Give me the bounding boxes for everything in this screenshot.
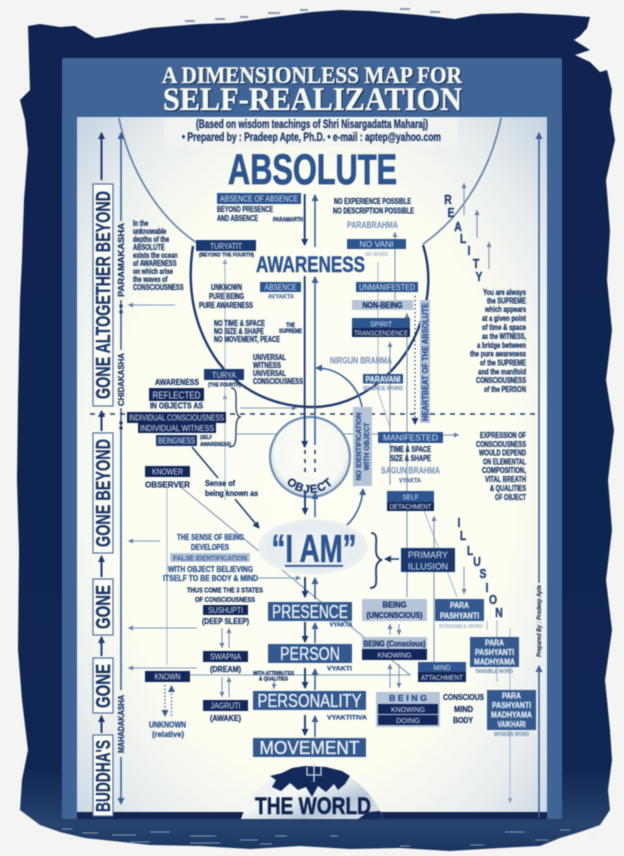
box: absence of absence: ABSENCE OF ABSENCE [220, 194, 298, 204]
text: beyond presence: PARAMARTH [273, 218, 303, 224]
box: manifested: MANIFESTED [383, 434, 438, 442]
subtitle text: (Based on wisdom teachings of Shri Nisargadatta Maharaj) [196, 119, 428, 131]
heading: awareness: AWARENESS [256, 252, 365, 277]
text: with object believing [163, 565, 258, 583]
box: para pashyanti madhyama vaikhari: MADHYAMA [491, 710, 532, 720]
text: no time and space: NO SIZE & SHAPE [214, 327, 264, 336]
box: spirit transcendence: TRANSCENDENCE [354, 328, 408, 338]
box: being conscious knowing: KNOWING [378, 650, 412, 660]
label: nirgun brahma: NIRGUN BRAHMA [330, 356, 392, 366]
box: para pashyanti madhyama: PASHYANTI [475, 648, 514, 657]
label: awake: (AWAKE) [210, 713, 241, 723]
text block: unknowable depths: In the [133, 220, 148, 228]
box: no identification: WITH OBJECT [362, 422, 371, 470]
box: para pashyanti: PARA [450, 601, 469, 610]
text: no time and space: NO TIME & SPACE [214, 319, 265, 328]
box: individual witness: INDIVIDUAL WITNESS [140, 424, 214, 433]
title [162, 63, 462, 118]
text block: unknowable depths [133, 220, 184, 292]
text block: expression of consciousness: ON ELEMENTAL [483, 458, 526, 466]
box: personality: PERSONALITY [258, 691, 362, 711]
illusion vertical letters: U [473, 555, 481, 569]
stage arrows [100, 133, 102, 733]
box: para pashyanti madhyama: PARA [485, 638, 504, 648]
subtitle text [182, 119, 441, 144]
I am ellipse: “I AM” [272, 528, 356, 571]
box: no vani [347, 239, 406, 249]
box: being conscious knowing [362, 637, 427, 660]
text: conscious mind body: CONSCIOUS [443, 692, 484, 702]
box: being unconscious: (UNCONSCIOUS) [366, 611, 423, 620]
text block: expression of consciousness: EXPRESSION OF [480, 431, 526, 440]
text: no experience: NO DESCRIPTION POSSIBLE [333, 206, 414, 216]
box: beingness: BEINGNESS [158, 436, 195, 446]
text block: unknowable depths: the waves of [133, 276, 168, 284]
text: the supreme: SUPREME [279, 329, 302, 335]
central down and up arrows [305, 577, 315, 737]
box: knower [145, 466, 190, 477]
illusion vertical letters: I [486, 581, 488, 595]
illusion vertical letters: L [460, 529, 466, 543]
reality vertical letters: T [473, 257, 480, 271]
label: intangible word: INTANGIBLE WORD [439, 624, 483, 630]
text block: you are always: CONSCIOUSNESS [476, 376, 526, 385]
box: para pashyanti madhyama: MADHYAMA [474, 658, 515, 666]
icon: continents [270, 766, 350, 797]
reality vertical letters: A [454, 220, 462, 234]
box: primary illusion: PRIMARY [408, 550, 449, 561]
stage: gone altogether beyond: GONE ALTOGETHER BEYOND [93, 191, 115, 399]
brace at individual consciousness [229, 388, 240, 447]
label: self awareness: (SELF [200, 435, 212, 441]
label: tangible word: TANGIBLE WORD [475, 669, 513, 675]
brace at I am [370, 533, 382, 588]
text: awareness reflected: AWARENESS [155, 377, 199, 387]
subtitle panel [164, 118, 458, 147]
the world globe [241, 762, 384, 820]
dotted arrow heartbeat [414, 296, 416, 424]
box: para pashyanti madhyama vaikhari: PASHYANTI [492, 701, 531, 710]
box: absence: ABSENCE [264, 283, 296, 292]
text block: unknowable depths: CONSCIOUSNESS [133, 284, 184, 292]
reality vertical letters [444, 193, 483, 284]
akasha scale line: PARAMAKASHA [116, 223, 126, 297]
object circle [268, 369, 352, 499]
text: conscious mind body [443, 692, 484, 725]
text: universal witness [253, 353, 303, 386]
text block: expression of consciousness: VITAL BREATH [485, 475, 526, 484]
dotted arrows known unknown [165, 685, 172, 716]
label: the fourth: (THE FOURTH) [208, 382, 241, 388]
label: deep sleep: (DEEP SLEEP) [202, 616, 249, 626]
text: no experience [333, 197, 414, 216]
reality vertical letters: R [444, 193, 452, 207]
text: unknown pure being: UNKNOWN [211, 283, 242, 292]
text block: expression of consciousness: & QUALITIES [490, 484, 526, 493]
text: with object believing: ITSELF TO BE BODY & MIND [163, 574, 258, 583]
text block: you are always: You are always [483, 288, 526, 297]
box: para pashyanti madhyama vaikhari: PARA [502, 692, 521, 700]
text block: expression of consciousness: WOULD DEPEND [479, 448, 526, 458]
text block: you are always: of the PERSON [484, 385, 526, 394]
box: self detachment [387, 491, 434, 511]
box: self detachment: SELF [402, 492, 419, 502]
text: beyond presence: BEYOND PRESENCE [217, 205, 273, 214]
box: primary illusion: ILLUSION [408, 562, 448, 572]
text block: you are always [470, 288, 526, 394]
box: being knowing doing: KNOWING [391, 705, 425, 714]
illusion vertical letters: L [467, 544, 473, 558]
text block: you are always: the SUPREME [487, 296, 526, 306]
box: sushupti: SUSHUPTI [208, 606, 243, 615]
text block: you are always: and the manifold [478, 368, 526, 376]
reality vertical letters: L [460, 232, 466, 246]
object circle: OBJECT [287, 477, 332, 494]
heading: the world: THE WORLD [255, 793, 371, 820]
box: being unconscious: BEING [382, 600, 406, 610]
text: conscious mind body: MIND [454, 704, 473, 714]
box: no identification: NO IDENTIFICATION [354, 412, 363, 480]
box: turya: TURYA [212, 370, 236, 380]
label: parabrahma: PARABRAHMA [347, 220, 398, 231]
title: A DIMENSIONLESS MAP FOR [162, 63, 462, 88]
left stage column [93, 133, 115, 816]
label: no word: NO WORD [365, 252, 388, 258]
box: known [145, 671, 190, 682]
box: para pashyanti [435, 599, 484, 621]
text block: you are always: of time & space [482, 323, 526, 332]
text: no time and space: NO MOVEMENT, PEACE [214, 335, 280, 344]
box: para pashyanti madhyama vaikhari [487, 690, 536, 730]
illusion vertical letters: S [480, 567, 487, 581]
label: vyakta: VYAKTA [330, 622, 353, 628]
box: known: KNOWN [154, 672, 181, 682]
box: being conscious knowing: BEING (Conscious) [364, 640, 426, 648]
text: thus come three states: OF CONSCIOUSNESS [195, 595, 255, 604]
text block: expression of consciousness: CONSCIOUSNESS [476, 440, 526, 449]
box: individual consciousness [127, 412, 226, 423]
text block: you are always: which appears [484, 305, 526, 314]
text block: you are always: as the WITNESS, [482, 332, 526, 341]
text block: expression of consciousness [476, 431, 526, 502]
box: spirit transcendence [352, 318, 410, 338]
box: non-being: NON-BEING [362, 301, 402, 310]
box: para pashyanti madhyama vaikhari: VAIKHARI [498, 720, 526, 729]
corner land [358, 811, 384, 819]
akasha scale line [116, 133, 126, 804]
text block: unknowable depths: ABSOLUTE [133, 244, 165, 252]
box: turyatit: TURYATIT [210, 241, 242, 251]
title: SELF-REALIZATION [163, 82, 462, 118]
label: silence word: SILENCE WORD [363, 386, 403, 392]
box: individual consciousness: INDIVIDUAL CONSCIOUSNESS [129, 414, 224, 422]
box: person: PERSON [280, 644, 340, 664]
reality vertical letters: I [468, 244, 470, 258]
label: self awareness [200, 435, 231, 448]
stage: gone lower: GONE [93, 664, 115, 708]
connector lines [128, 232, 510, 803]
icon: trident [307, 762, 321, 782]
heading: absolute: ABSOLUTE [228, 146, 397, 194]
box: presence: PRESENCE [272, 602, 348, 622]
box: being knowing doing [376, 692, 440, 727]
box: unmanifested: UNMANIFESTED [359, 283, 415, 292]
curved arrows [316, 368, 363, 526]
text: unknown relative [149, 720, 186, 739]
text block: you are always: at a given point [482, 314, 526, 323]
akasha scale line: CHIDAKASHA [116, 353, 126, 406]
box: para pashyanti madhyama [470, 637, 519, 667]
box: para pashyanti: PASHYANTI [440, 612, 479, 620]
text: sense of being known as: Sense of [205, 478, 235, 488]
text: with attributes: WITH ATTRIBUTES [253, 671, 294, 677]
box: jagruti [203, 700, 248, 711]
box: mind attachment [418, 662, 466, 682]
illusion vertical letters: N [495, 606, 503, 620]
box: mind attachment: ATTACHMENT [421, 673, 463, 682]
text: with attributes: & QUALITIES [259, 676, 288, 682]
text: unknown relative: UNKNOWN [149, 720, 186, 730]
text: universal witness: UNIVERSAL [253, 353, 286, 362]
label: dream: (DREAM) [210, 664, 241, 674]
box: jagruti: JAGRUTI [210, 702, 240, 710]
text block: you are always: of the SUPREME [480, 358, 526, 368]
box: reflected: REFLECTED [152, 390, 201, 402]
label: vyakti: VYAKTI [327, 666, 352, 672]
text block: unknowable depths: of AWARENESS [133, 260, 177, 268]
box: swapna: SWAPNA [210, 652, 242, 662]
horizontal dashed boundary [90, 413, 535, 415]
box: no identification [353, 407, 372, 486]
text: the supreme: THE [286, 323, 295, 329]
text: with attributes [253, 671, 294, 682]
subtitle text: • Prepared by : Pradeep Apte, Ph.D. • e-mail : aptep@yahoo.com [182, 132, 441, 144]
text block: expression of consciousness: OF OBJECT [495, 493, 526, 502]
box: mind attachment: MIND [434, 665, 450, 672]
box: manifested [378, 432, 443, 443]
text block: unknowable depths: unknowable [133, 228, 166, 236]
text: conscious mind body: BODY [453, 715, 473, 725]
text: universal witness: WITNESS [253, 361, 282, 370]
text: unknown relative: (relative) [152, 729, 184, 739]
reality vertical letters: E [448, 206, 455, 220]
text: unknown pure being [199, 283, 253, 310]
box: paravani: PARAVANI [366, 375, 400, 384]
box: heartbeat of the absolute: HEARTBEAT OF THE ABSOLUTE [421, 303, 430, 421]
box: being knowing doing: B E I N G [389, 694, 427, 703]
stage: gone beyond: GONE BEYOND [93, 439, 115, 547]
text: beyond presence [217, 205, 303, 224]
box: spirit transcendence: SPIRIT [370, 320, 392, 328]
text: beyond presence: AND ABSENCE [217, 214, 258, 223]
label: avyakta: AVYAKTA [268, 294, 294, 300]
reality curves [119, 118, 501, 244]
box: knower: KNOWER [152, 468, 183, 476]
poster blue panel [62, 58, 562, 819]
box: turya [204, 369, 244, 380]
box: movement: MOVEMENT [260, 738, 360, 758]
map background [77, 117, 547, 812]
box: swapna [203, 651, 248, 662]
sense of being known arrows [192, 447, 259, 528]
stage: gone upper: GONE [93, 585, 115, 629]
text: time and space size and shape [390, 445, 431, 463]
text: no experience: NO EXPERIENCE POSSIBLE [334, 197, 411, 206]
text: in objects as: IN OBJECTS AS [150, 400, 203, 410]
central up and down arrows [305, 194, 315, 370]
text: with object believing: WITH OBJECT BELIEVING [168, 565, 253, 574]
arrows object to I am [305, 492, 315, 517]
reality arrows [464, 183, 489, 269]
text: the sense of being develops: DEVELOPES [191, 543, 230, 552]
akasha scale line: MAHADAKASHA [116, 695, 126, 753]
text: unknown pure being: PURE BEING [209, 292, 244, 301]
illusion vertical letters: I [458, 516, 460, 530]
text: time and space size and shape: TIME & SPACE [390, 445, 431, 454]
label: vyaktitiva: VYAKTITIVA [327, 714, 367, 722]
text: the supreme [279, 323, 302, 335]
label: spoken word: SPOKEN WORD [494, 732, 529, 738]
text: thus come three states: THUS COME THE 3 STATES [187, 586, 263, 594]
text: time and space size and shape: SIZE & SHAPE [390, 454, 431, 463]
awareness circle arc [191, 245, 428, 407]
box: turyatit [196, 240, 256, 251]
bottom dark bar [77, 812, 547, 819]
right scale arrow: Prepared By : Pradeep Apte [536, 585, 543, 657]
text: universal witness: UNIVERSAL [253, 369, 286, 378]
box: being unconscious [362, 599, 427, 621]
text block: you are always: the pure awareness [470, 350, 526, 358]
illusion vertical letters [458, 516, 503, 620]
text: universal witness: CONSCIOUSNESS [253, 377, 303, 386]
I am ellipse [258, 519, 368, 575]
text block: unknowable depths: depths of the [133, 236, 169, 244]
arrow: primary illusion to brace [385, 558, 399, 560]
box: non-being [352, 300, 413, 310]
text block: unknowable depths: on which arise [133, 268, 173, 276]
stage: buddha's: BUDDHA'S [93, 740, 115, 812]
text: unknown pure being: PURE AWARENESS [199, 301, 253, 310]
box: no vani: NO VANI [360, 240, 394, 249]
illusion vertical letters: O [489, 593, 497, 607]
box: beingness [156, 435, 197, 446]
label: observer: OBSERVER [145, 480, 190, 490]
box: false identification: FALSE IDENTIFICATION [173, 554, 247, 562]
box: primary illusion [401, 548, 455, 572]
label: beyond the fourth: (BEYOND THE FOURTH) [199, 252, 254, 258]
text: sense of being known as [205, 478, 258, 498]
text: sense of being known as: being known as [205, 488, 258, 498]
box: being knowing doing: DOING [396, 716, 420, 725]
text block: you are always: a bridge between [477, 341, 526, 350]
box: self detachment: DETACHMENT [390, 502, 432, 511]
text block: expression of consciousness: COMPOSITION, [482, 466, 526, 475]
text: thus come three states [187, 586, 263, 604]
reality vertical letters: Y [476, 270, 483, 284]
text: the sense of being develops [177, 533, 244, 552]
label: vyakta: VYAKTA [399, 478, 421, 484]
text block: unknowable depths: exists the ocean [133, 252, 178, 260]
text: the sense of being develops: THE SENSE OF BEING [177, 533, 244, 542]
label: sagun brahma: SAGUN BRAHMA [381, 466, 440, 476]
label: self awareness: AWARENESS) [200, 442, 231, 448]
text: no time and space [214, 319, 280, 344]
